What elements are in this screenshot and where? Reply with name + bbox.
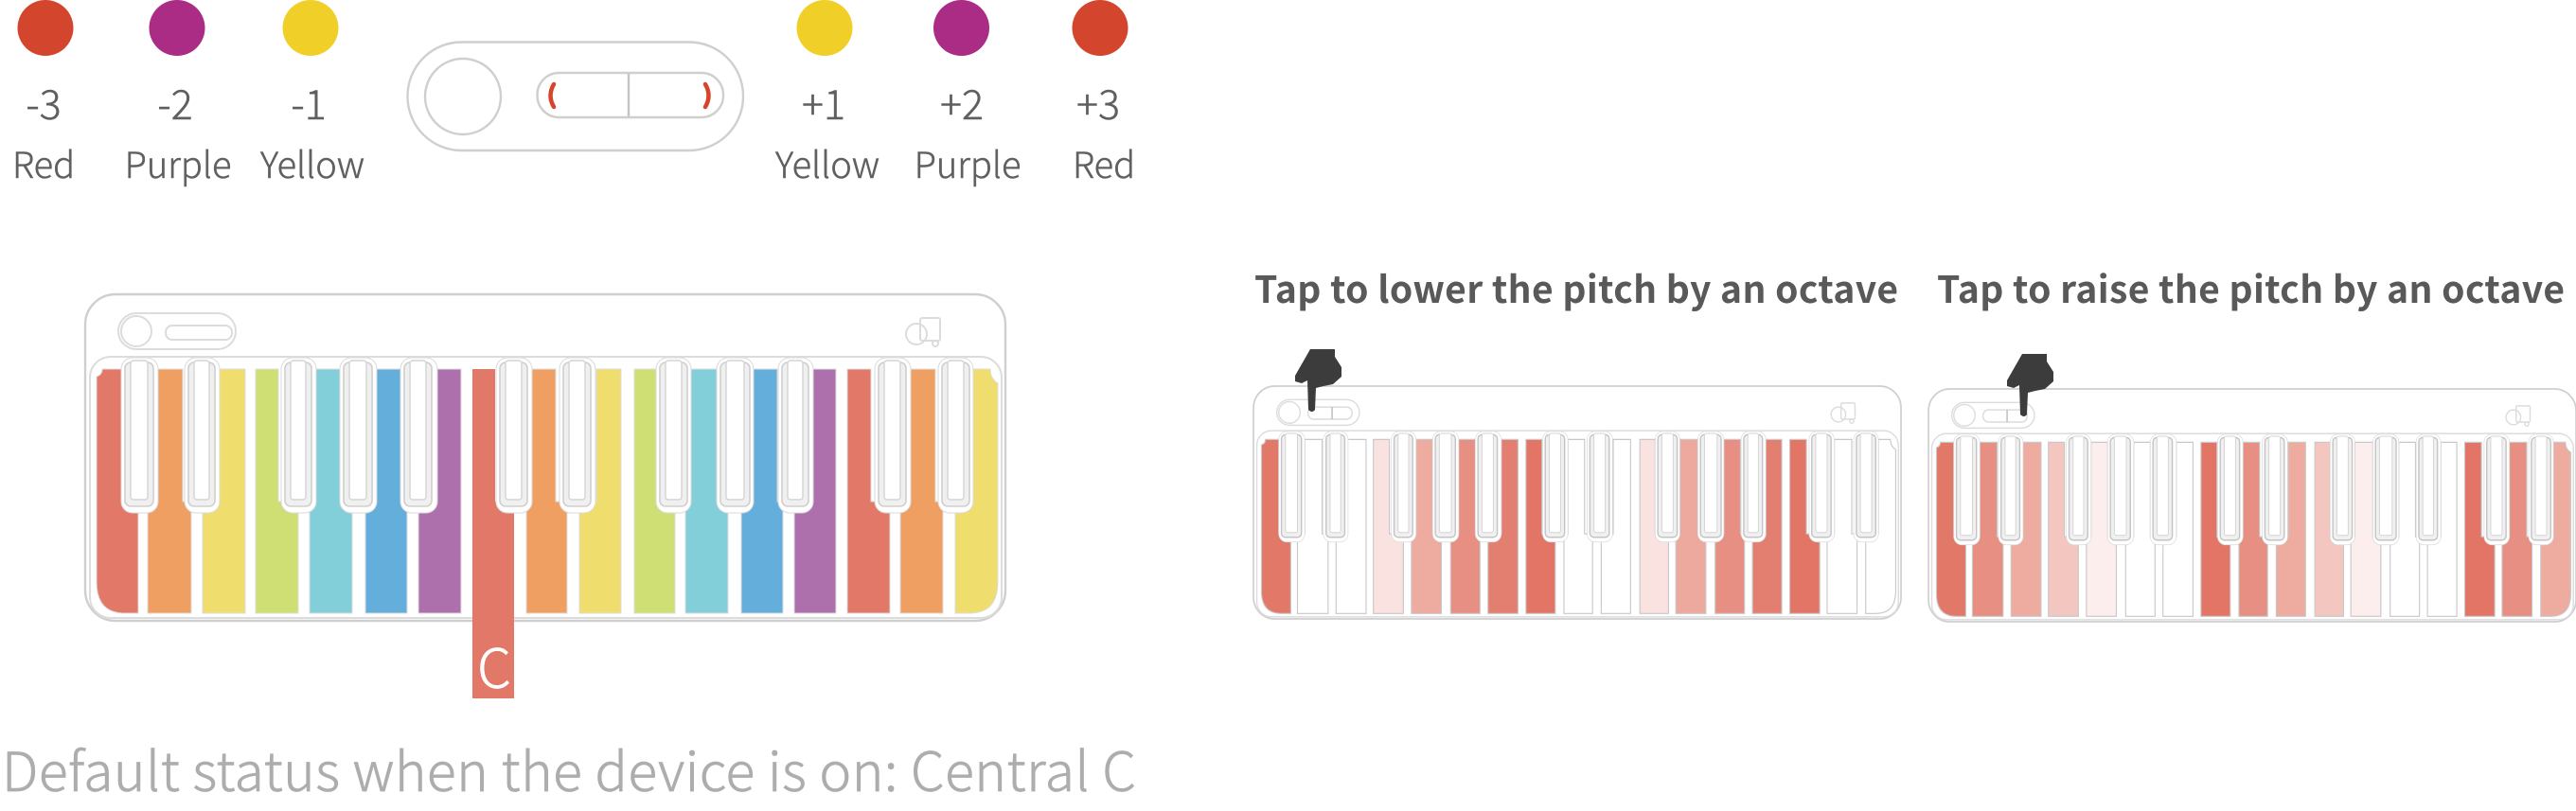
label: -3: -3 <box>26 73 62 132</box>
keyboard: raised octave state <box>1928 389 2576 622</box>
label: -2: -2 <box>157 73 193 132</box>
keyboard: default rainbow state <box>85 294 1005 704</box>
icon: hand tapping the lower button <box>1295 349 1341 412</box>
caption: default status: Default status when the device is on: Central C <box>2 730 1136 807</box>
dot: -2 purple <box>150 0 204 56</box>
key: central C highlighted <box>472 369 514 698</box>
icon: hand tapping the raise button <box>2007 354 2053 416</box>
label: +2: +2 <box>940 73 984 132</box>
label: C: C <box>477 626 511 704</box>
label: +3: +3 <box>1076 73 1120 132</box>
label: Purple: Purple <box>125 136 231 188</box>
label: Red: Red <box>12 136 75 188</box>
label: -1: -1 <box>291 73 327 132</box>
dot: +1 yellow <box>797 0 852 56</box>
label: Yellow: Yellow <box>775 136 879 188</box>
dot: +3 red <box>1072 0 1128 56</box>
icon: device control panel with octave buttons <box>407 42 743 150</box>
label: Red: Red <box>1073 136 1135 188</box>
dot: +2 purple <box>933 0 989 56</box>
legend: negative octave colours <box>12 0 364 188</box>
dot: -1 yellow <box>282 0 339 56</box>
legend: positive octave colours <box>775 0 1135 188</box>
label: +1: +1 <box>802 73 845 132</box>
heading: lower pitch: Tap to lower the pitch by an octave <box>1254 261 1898 314</box>
keyboard: lowered octave state <box>1253 386 1901 619</box>
label: Yellow: Yellow <box>260 136 364 188</box>
dot: -3 red <box>17 0 74 56</box>
label: Purple: Purple <box>915 136 1021 188</box>
heading: raise pitch: Tap to raise the pitch by an octave <box>1937 261 2565 314</box>
